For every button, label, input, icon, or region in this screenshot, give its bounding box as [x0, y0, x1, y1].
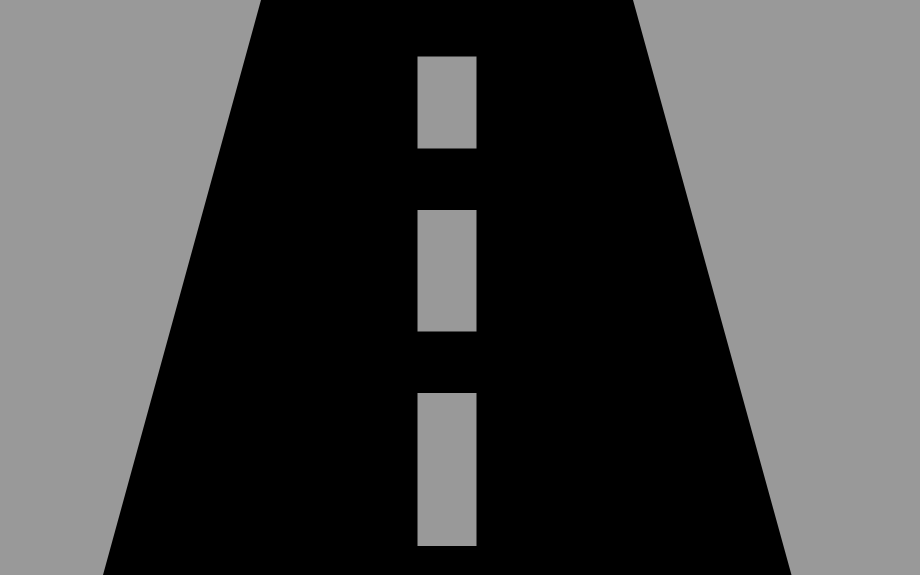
lane dash: bottom	[418, 393, 476, 546]
lane dash: top	[418, 56, 476, 148]
road surface	[103, 0, 792, 575]
lane dash: middle	[418, 210, 476, 332]
